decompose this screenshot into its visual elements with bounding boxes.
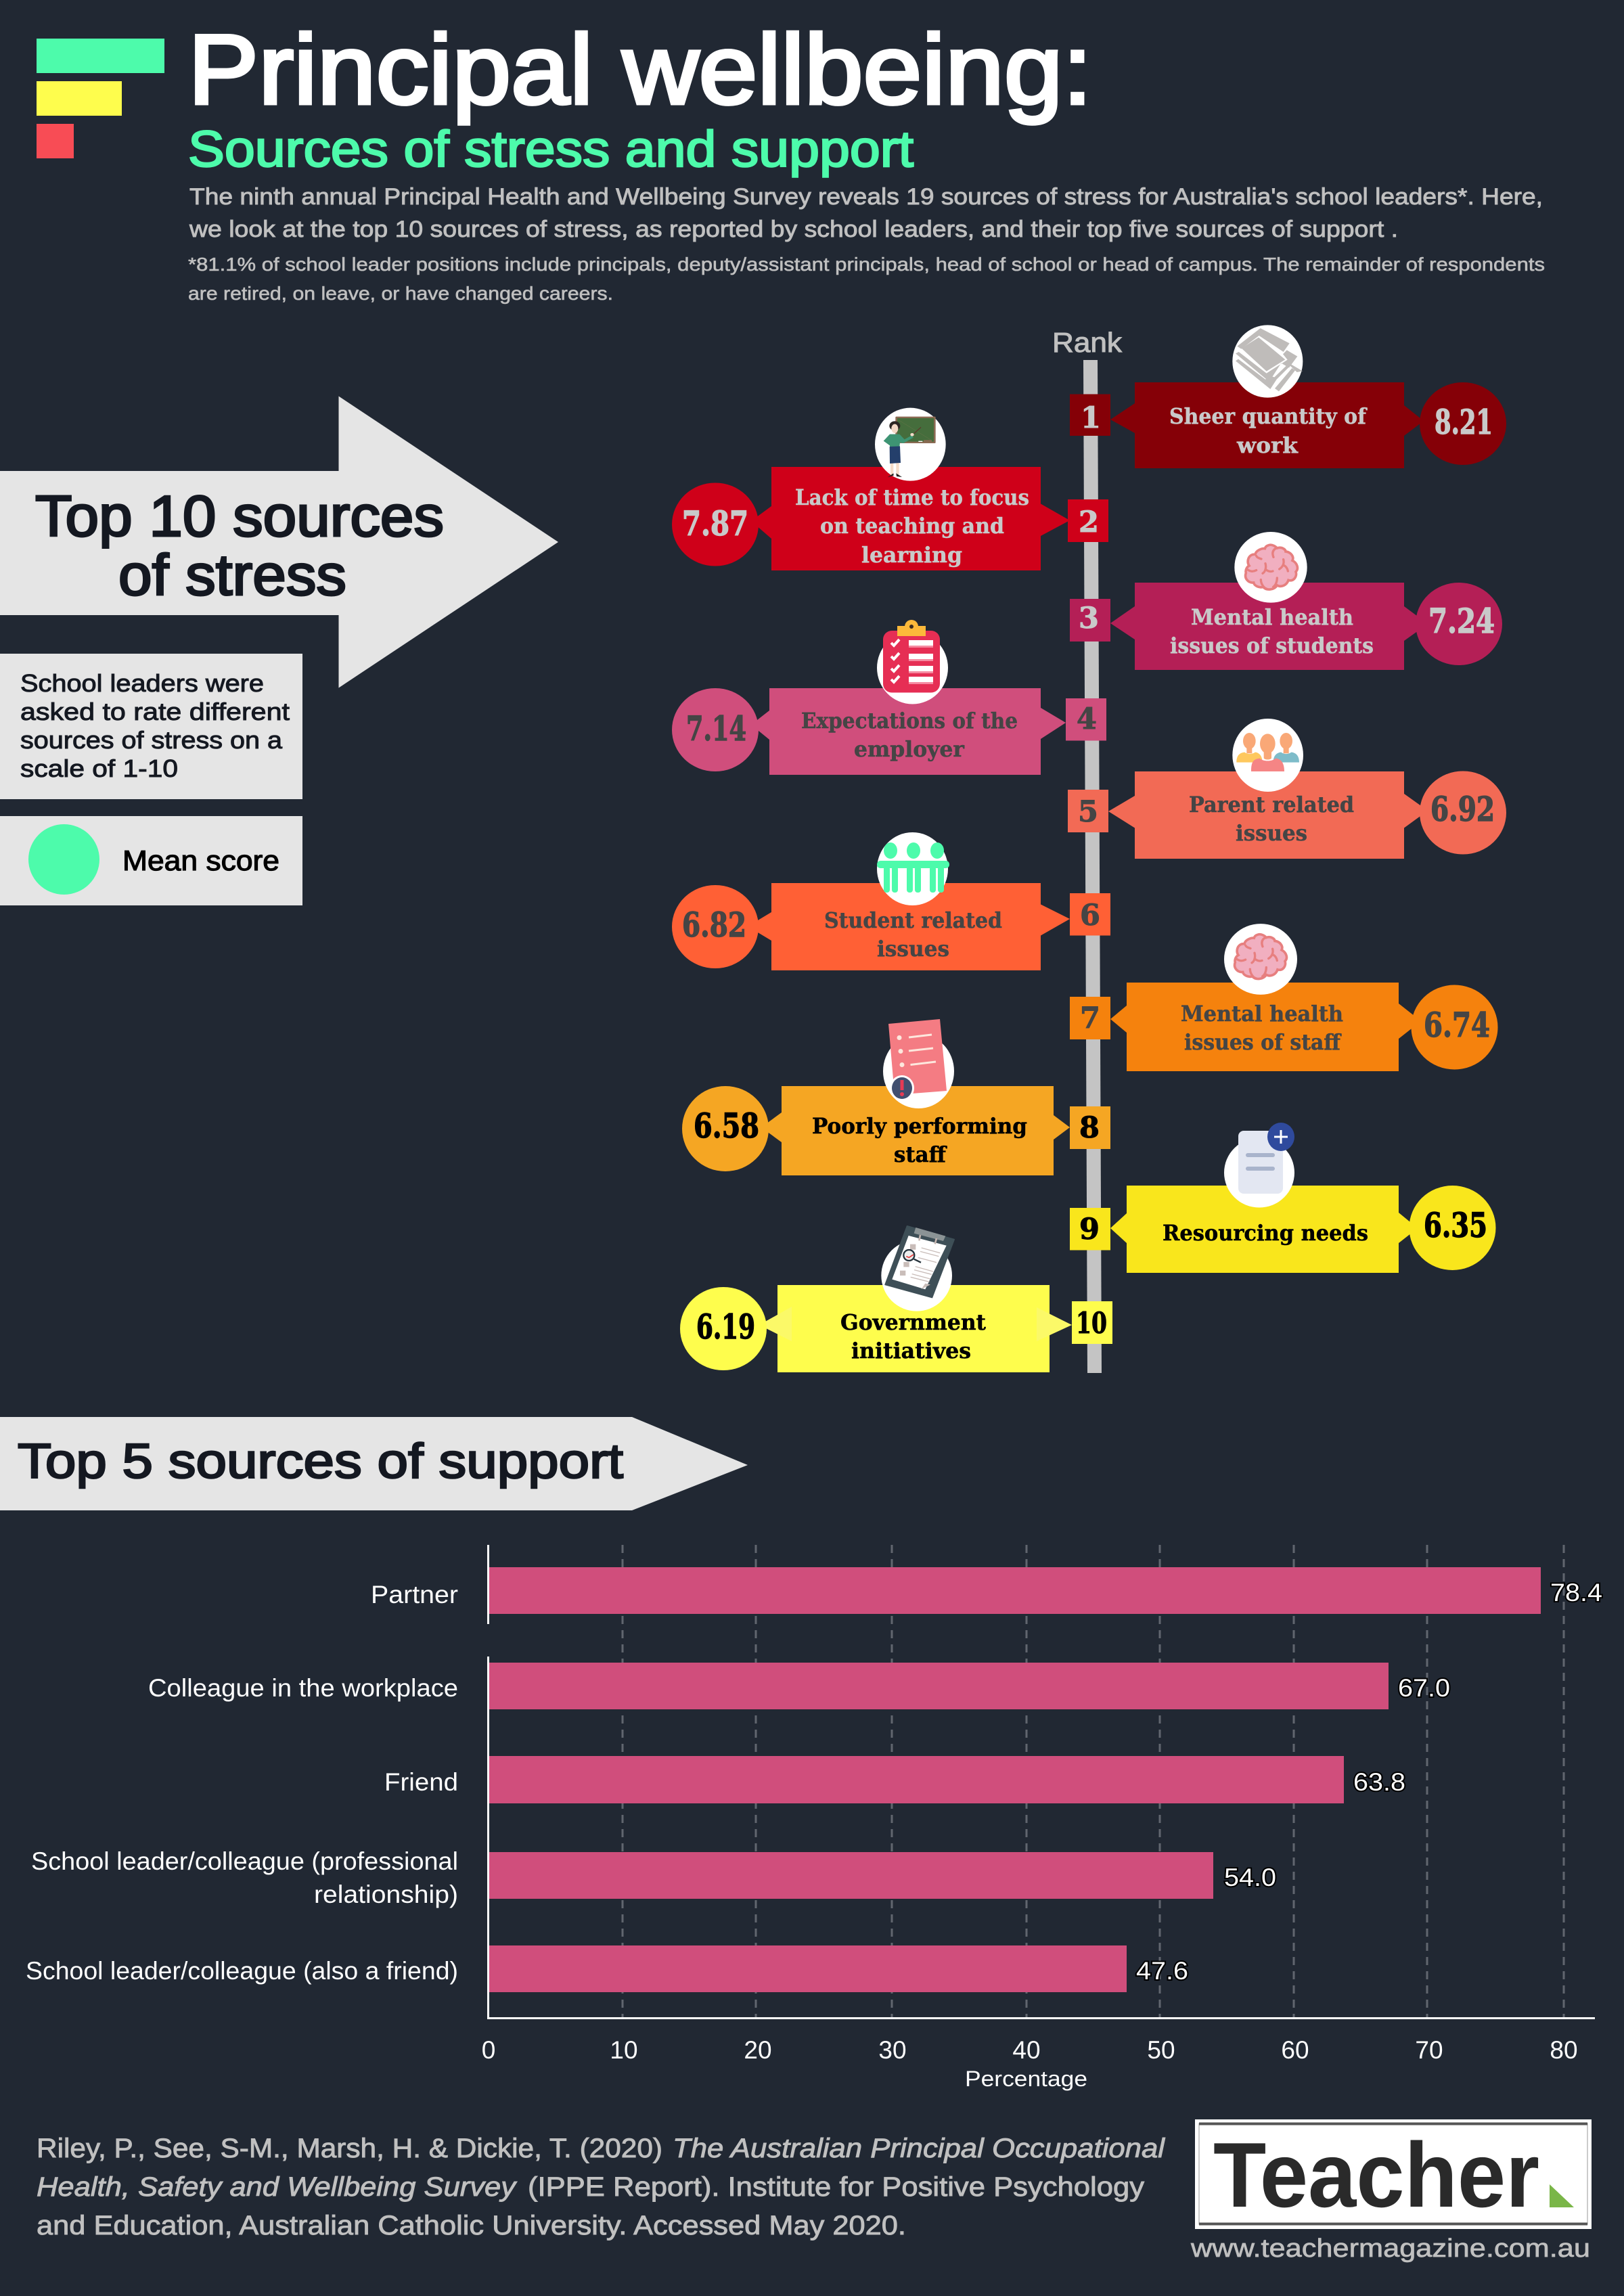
bar: school leader/colleague (also a friend): 47.6 [1136,1957,1188,1985]
label text [840,1309,986,1364]
website url: www.teachermagazine.com.au [1190,2234,1590,2263]
rank number: 3 [1079,602,1099,635]
logo: Teacher: Teacher [1213,2123,1539,2226]
legend: mean score [0,816,302,905]
intro text: The ninth annual Principal Health and Wellbeing Survey reveals 19 sources of stress for Australia's school leaders*. Here, [189,184,1543,210]
bar: school leader/colleague (professional relationship): 54.0 [1224,1864,1276,1891]
bar: school leader/colleague (also a friend) [26,1945,1188,1992]
icon: clipboard with magnifier [881,1226,954,1311]
label box [1070,382,1424,468]
icon: stack of papers [1232,325,1303,398]
score: 6.82 [682,905,746,945]
panel: rank 9 resourcing needs [1070,1123,1495,1273]
axis tick labels: 70 [1415,2036,1443,2064]
panel: rank 6 student related issues [672,832,1110,970]
axis tick labels: 0 [482,2036,495,2064]
panel: rank 8 poorly performing staff [682,1019,1110,1175]
axis title: Percentage [965,2067,1087,2091]
icon: brain [1234,532,1307,603]
rank number: 5 [1078,795,1098,829]
label text: Government [840,1309,986,1335]
label text [812,1113,1027,1167]
bar chart: sources of support [26,1545,1602,2091]
label text [1169,403,1368,458]
panel: rank 4 expectations of the employer [672,620,1106,775]
panel: scale explanation: sources of stress on a [20,726,283,754]
axis tick labels: 10 [610,2036,638,2064]
icon: poor report [883,1019,954,1108]
label text: issues of staff [1184,1029,1342,1055]
label text: Sheer quantity of [1169,403,1368,429]
citation: (IPPE Report). Institute for Positive Psychology [528,2172,1144,2202]
panel: rank 5 parent related issues [1068,719,1506,859]
bar: partner: 78.4 [1550,1579,1602,1606]
bar: friend [384,1756,1405,1803]
citation: and Education, Australian Catholic University. Accessed May 2020. [37,2211,906,2241]
score: 7.87 [682,503,748,543]
panel: rank 7 mental health of staff [1070,924,1498,1071]
axis tick labels: 30 [878,2036,907,2064]
arrow heading: top 10 sources of stress [0,397,558,688]
icon: brain [1224,924,1297,995]
score: 7.14 [686,708,746,748]
bar: colleague in the workplace [148,1663,1450,1709]
label box [1070,583,1428,670]
citation: Health, Safety and Wellbeing Survey [37,2172,518,2202]
bar: school leader/colleague (professional relationship) [31,1847,1276,1908]
label box [1070,1186,1418,1273]
score [680,1287,767,1370]
label text: Student related [824,907,1002,933]
citation [37,2134,1165,2241]
label text [1189,792,1354,846]
bar: partner: Partner [371,1581,458,1608]
score: 6.74 [1424,1005,1490,1045]
icon: teacher at blackboard [875,408,946,481]
label box [748,883,1110,970]
icon: checklist clipboard [877,620,948,704]
footnote [188,254,1545,304]
panel: rank 10 government initiatives [680,1226,1112,1372]
panel: scale explanation: asked to rate different [20,698,290,725]
score [682,1086,769,1171]
bar: school leader/colleague (professional relationship): relationship) [314,1881,458,1908]
label box [751,688,1106,775]
label text: Mental health [1181,1001,1343,1027]
score [672,688,759,771]
axis tick labels: 80 [1550,2036,1578,2064]
citation: Riley, P., See, S-M., Marsh, H. & Dickie, T. (2020) [37,2134,662,2163]
score [672,483,759,566]
label text: staff [894,1142,947,1167]
legend: mean score: Mean score [122,845,279,876]
score: 6.35 [1424,1205,1487,1245]
score: 6.19 [696,1307,755,1347]
score [1412,985,1498,1069]
footnote: are retired, on leave, or have changed careers. [188,283,613,304]
panel: rank 1 sheer quantity of work [1070,325,1506,468]
score: 7.24 [1428,601,1495,641]
arrow heading: top 10 sources of stress: of stress [118,543,346,608]
bar: partner [371,1567,1602,1614]
bar: school leader/colleague (professional relationship): School leader/colleague (professional [31,1847,458,1875]
label box [759,1285,1112,1372]
bar: friend: Friend [384,1768,458,1796]
score: 8.21 [1435,402,1493,442]
title: Principal wellbeing: [188,14,1092,125]
axis tick labels: 20 [744,2036,772,2064]
arrow heading: top 5 sources of support [0,1417,748,1510]
label box [1068,771,1428,859]
axis tick labels: 40 [1012,2036,1041,2064]
label box [1070,983,1421,1071]
score: 6.58 [694,1106,759,1146]
label box [761,1086,1110,1175]
panel: rank 3 mental health of students [1070,532,1502,670]
score [672,885,759,968]
label text: issues [877,936,949,962]
label text: on teaching and [820,513,1004,539]
rank number: 2 [1079,505,1099,539]
label text: employer [854,736,965,762]
label text: Resourcing needs [1163,1220,1368,1246]
arrow heading: top 5 sources of support: Top 5 sources of support [18,1435,623,1489]
rank number: 9 [1079,1213,1100,1246]
logo bars [37,39,164,158]
axis tick labels [482,2036,1578,2064]
rank number: 4 [1077,702,1097,736]
label text: Mental health [1191,604,1353,630]
axis tick labels: 60 [1281,2036,1309,2064]
label text: Poorly performing [812,1113,1027,1139]
icon: students [877,832,949,905]
bar: colleague in the workplace: Colleague in the workplace [148,1674,458,1702]
bar: school leader/colleague (also a friend): School leader/colleague (also a friend) [26,1957,458,1985]
arrow heading: top 10 sources of stress: Top 10 sources [35,485,444,549]
label text: Lack of time to focus [795,485,1029,510]
label text: issues [1236,820,1307,846]
label text [795,485,1029,568]
bar: friend: 63.8 [1353,1768,1405,1796]
label text: issues of students [1170,633,1374,658]
score [1416,583,1502,665]
label text [801,708,1018,762]
label text [1181,1001,1343,1055]
score [1420,382,1506,465]
panel: scale explanation: scale of 1-10 [20,755,178,782]
icon: three parents [1232,719,1303,792]
citation: The Australian Principal Occupational [673,2134,1165,2163]
rank number: 1 [1081,401,1101,435]
label text: Expectations of the [801,708,1018,734]
rank number: 8 [1079,1111,1100,1145]
score [1420,771,1506,854]
label text [824,907,1002,962]
label text: work [1236,432,1299,458]
label text: initiatives [851,1338,971,1364]
intro text: we look at the top 10 sources of stress, as reported by school leaders, and their top five sources of support . [189,217,1398,242]
intro text [189,184,1543,242]
panel: scale explanation [0,654,302,799]
panel: scale explanation: School leaders were [20,669,264,697]
rank number: 7 [1080,1001,1100,1035]
score: 6.92 [1430,789,1495,829]
icon: document with plus [1224,1123,1294,1207]
label text: Parent related [1189,792,1354,817]
axis tick labels: 50 [1147,2036,1175,2064]
rank heading: Rank [1052,327,1123,358]
label text: learning [861,542,962,568]
label box [751,467,1108,570]
rank number: 6 [1080,899,1100,932]
bar: colleague in the workplace: 67.0 [1398,1674,1450,1702]
subtitle: Sources of stress and support [188,120,914,177]
score [1409,1186,1495,1270]
panel: rank 2 lack of time [672,408,1108,570]
rank pole [1083,360,1102,1373]
footnote: *81.1% of school leader positions include principals, deputy/assistant principals, head of school or head of campus. The remainder of respondents [188,254,1545,275]
rank number: 10 [1076,1307,1107,1341]
label text [1170,604,1374,658]
